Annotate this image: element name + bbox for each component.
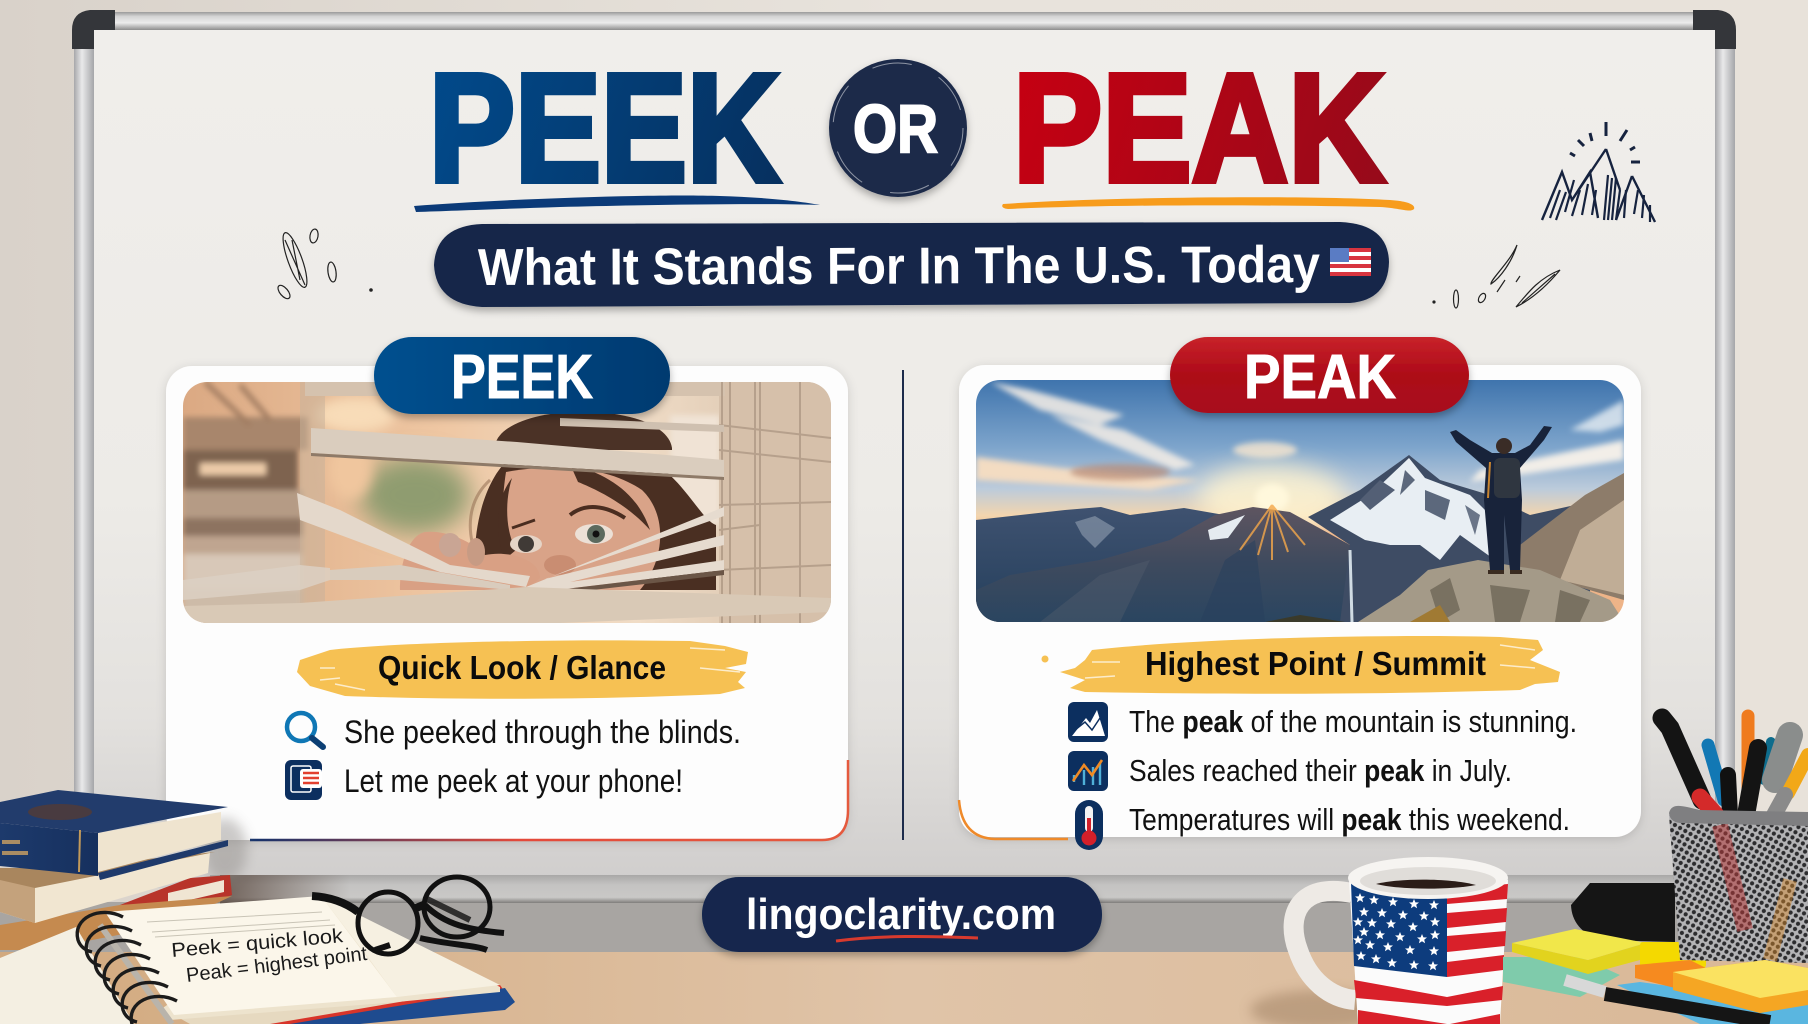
example: mountain: The peak of the mountain is stunning. [1129, 704, 1577, 739]
OR badge [829, 59, 967, 197]
icon: magnifier [287, 713, 323, 747]
icon: US flag [1330, 248, 1371, 276]
right cliff [1520, 473, 1624, 600]
title underline blue [414, 195, 820, 212]
footer url pill [702, 877, 1102, 952]
far mountains [976, 507, 1220, 622]
eyes [510, 507, 625, 575]
hand [400, 532, 540, 590]
hair [495, 412, 672, 450]
hiker [1450, 426, 1552, 572]
desk accessories [1503, 716, 1808, 1024]
subtitle banner [434, 222, 1389, 307]
mug [1294, 857, 1508, 1024]
notebook [0, 896, 515, 1024]
pen holder [1669, 815, 1808, 963]
icon: mountain [1068, 702, 1108, 742]
face [503, 467, 660, 590]
opened slats [297, 493, 530, 587]
pill label PEEK [374, 337, 670, 414]
black eraser [1571, 883, 1675, 942]
example: temperature: Temperatures will peak this weekend. [1129, 802, 1570, 837]
desk [0, 952, 1808, 1024]
example: phone [285, 760, 683, 800]
main slat [311, 428, 724, 477]
title underline orange [1002, 197, 1414, 211]
doodle mountain [1542, 122, 1655, 222]
yellow sticky notes [1512, 943, 1646, 974]
orange sticky [1635, 960, 1720, 988]
desk pen [1565, 980, 1605, 992]
blue notebook [1617, 982, 1808, 1024]
photo: hiker on mountain at sunrise [976, 380, 1624, 622]
pill label PEEK: PEEK [451, 343, 593, 412]
title: PEAK: PEAK [1013, 42, 1385, 214]
example: sales: Sales reached their peak in July. [1129, 753, 1512, 788]
spiral binding [77, 912, 177, 1024]
glasses [312, 877, 504, 954]
example: temperature [1075, 800, 1570, 850]
notebook: Peak = highest point [185, 943, 369, 987]
pill label PEAK [1170, 337, 1469, 413]
books stack [0, 790, 247, 950]
definition: quick look: Quick Look / Glance [378, 649, 666, 686]
centre mountain [976, 507, 1390, 622]
divider [902, 370, 904, 840]
panel: PEEK [166, 337, 848, 840]
foreground rock [1358, 560, 1624, 622]
definition: highest point [1042, 636, 1560, 694]
clouds [976, 382, 1624, 490]
third red book [120, 875, 232, 925]
big mountain [1308, 455, 1590, 622]
large sticky note [1673, 960, 1808, 1013]
top blue book [98, 812, 221, 872]
icon: phone with chat [285, 760, 322, 800]
bottom slat [183, 587, 831, 623]
icon: chart [1068, 751, 1108, 791]
subtitle banner: What It Stands For In The U.S. Today [478, 236, 1320, 297]
whiteboard [72, 10, 1736, 900]
pill label PEAK: PEAK [1244, 343, 1396, 412]
handwritten notes: Peek = quick look [171, 925, 345, 962]
second tan book [0, 852, 210, 923]
icon: thermometer [1075, 800, 1103, 850]
panel: PEAK [959, 337, 1641, 850]
definition: quick look [297, 640, 748, 699]
lower wall and tray [0, 875, 1808, 957]
snow [1330, 458, 1500, 560]
OR badge: OR [853, 91, 938, 167]
mint notepad [1503, 957, 1620, 997]
title: PEEK: PEEK [429, 42, 780, 214]
doodle left [276, 228, 372, 301]
photo: girl peeking through blinds [183, 382, 831, 623]
sun rays [1240, 505, 1305, 560]
definition: highest point: Highest Point / Summit [1145, 645, 1486, 682]
example: phone: Let me peek at your phone! [344, 763, 683, 799]
footer url pill: lingoclarity.com [746, 890, 1056, 939]
pens [1662, 716, 1808, 815]
doodle right [1433, 245, 1560, 308]
example: magnifier: She peeked through the blinds. [344, 714, 741, 750]
